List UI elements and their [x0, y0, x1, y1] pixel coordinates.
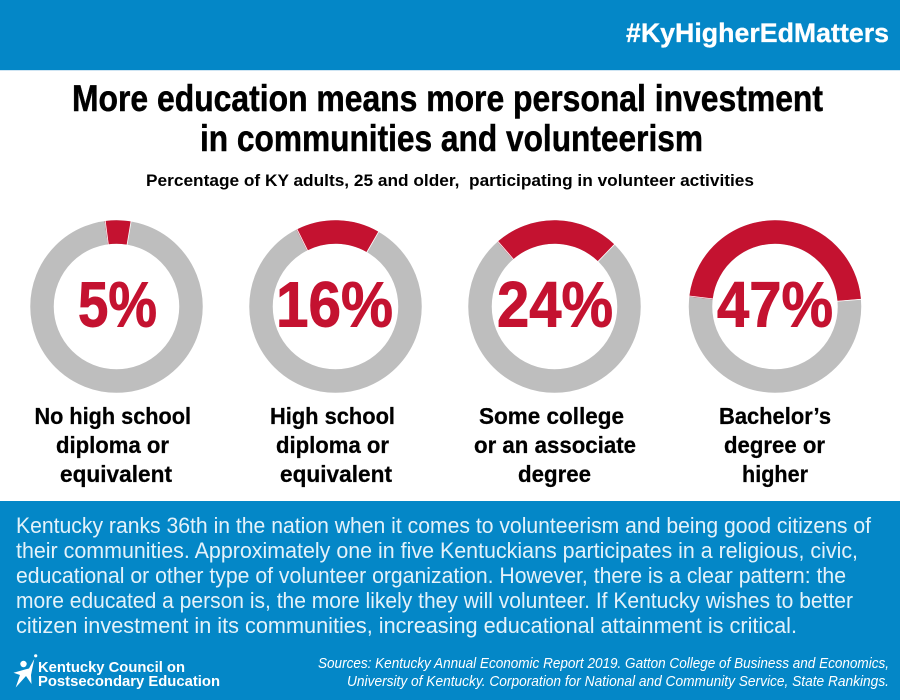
label: some college — [474, 403, 636, 487]
donut: 16% high school — [236, 207, 435, 406]
sources — [318, 655, 889, 690]
donut: 47% bachelor's: 47% — [717, 268, 833, 340]
donut: 5% no high school: 5% — [78, 268, 157, 340]
footer panel — [0, 501, 900, 700]
title: in communities and volunteerism — [200, 118, 703, 159]
donut: 5% no high school — [33, 220, 200, 390]
body paragraph: citizen investment in its communities, increasing educational attainment is critical. — [16, 613, 797, 638]
donut: 47% bachelor's — [688, 223, 862, 390]
hashtag: #KyHigherEdMatters — [626, 18, 889, 48]
donut: 16% high school: 16% — [276, 268, 393, 340]
logo: Kentucky Council on Postsecondary Education — [14, 654, 220, 690]
label: no high school: diploma or — [56, 432, 169, 458]
label: some college: degree — [518, 461, 591, 487]
label: high school — [270, 403, 395, 487]
subtitle: Percentage of KY adults, 25 and older, participating in volunteer activities — [146, 171, 754, 190]
donut: 24% some college — [449, 201, 660, 412]
label: no high school: equivalent — [60, 461, 172, 487]
label: no high school: No high school — [34, 403, 191, 429]
header band — [0, 0, 900, 71]
body paragraph: educational or other type of volunteer organization. However, there is a clear pattern: the — [16, 563, 846, 588]
title — [72, 78, 823, 159]
body paragraph: Kentucky ranks 36th in the nation when it comes to volunteerism and being good citizens of — [16, 513, 872, 538]
logo: Kentucky Council on Postsecondary Education: Kentucky Council on — [38, 659, 185, 676]
label: bachelor's: Bachelor’s — [719, 403, 831, 429]
label: no high school — [34, 403, 191, 487]
donut: 24% some college: 24% — [497, 268, 613, 340]
body paragraph: more educated a person is, the more likely they will volunteer. If Kentucky wishes to better — [16, 588, 853, 613]
label: some college: Some college — [479, 403, 624, 429]
label: some college: or an associate — [474, 432, 636, 458]
logo: Kentucky Council on Postsecondary Education: Postsecondary Education — [38, 673, 220, 690]
body paragraph — [16, 513, 872, 638]
label: high school: equivalent — [280, 461, 392, 487]
icon: reaching figure — [14, 654, 37, 688]
label: bachelor's: higher — [742, 461, 808, 487]
body paragraph: their communities. Approximately one in five Kentuckians participates in a religious, civic, — [16, 538, 858, 563]
label: high school: High school — [270, 403, 395, 429]
label: bachelor's: degree or — [724, 432, 825, 458]
label: high school: diploma or — [276, 432, 389, 458]
label: bachelor's — [719, 403, 831, 487]
